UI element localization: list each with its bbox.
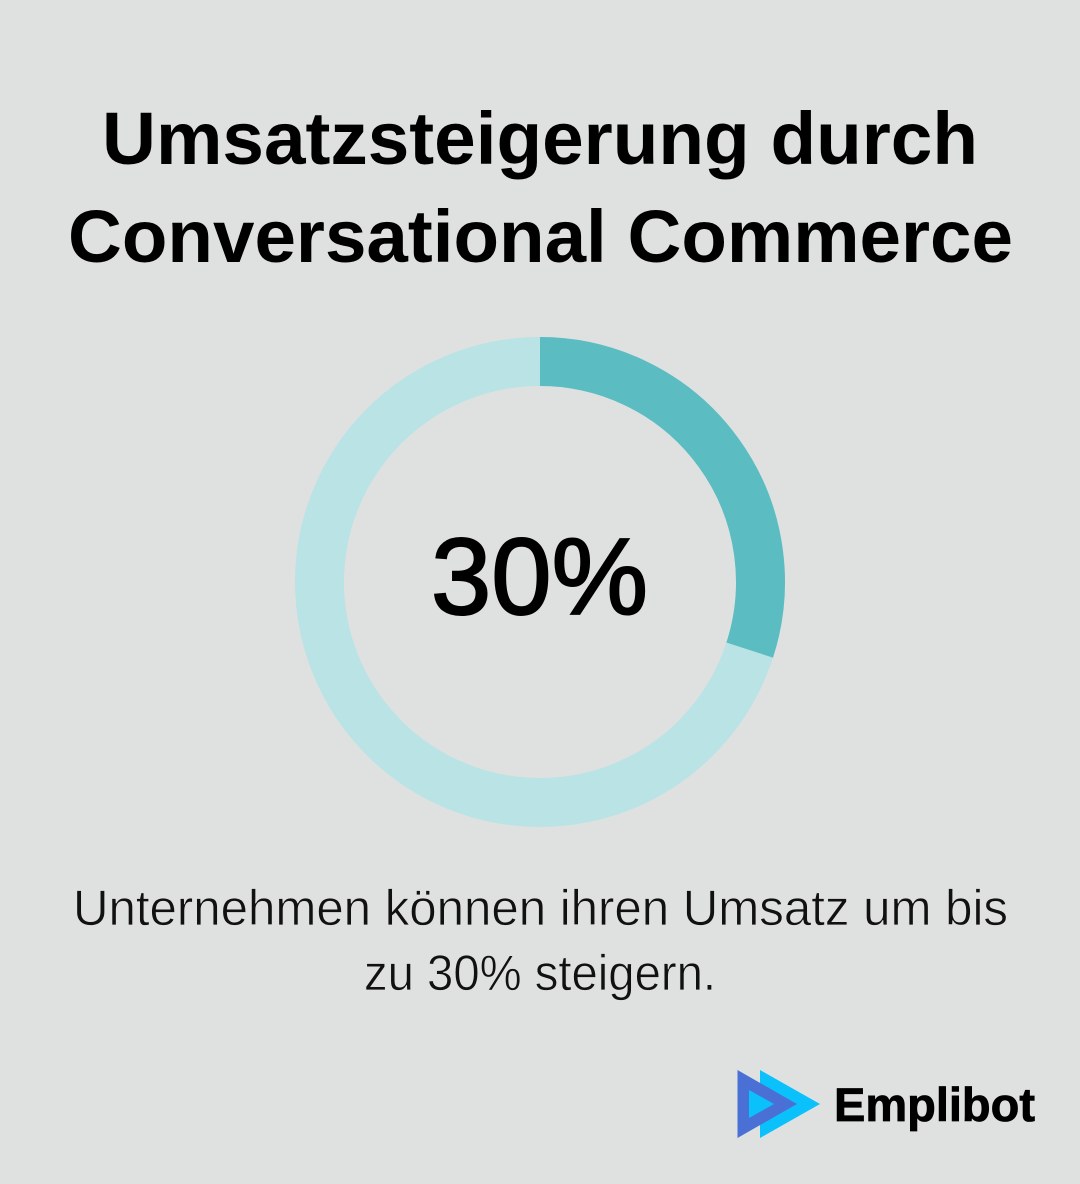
logo: Emplibot <box>738 1070 1035 1138</box>
description text: zu 30% steigern. <box>364 945 716 1001</box>
donut chart: 30% <box>320 362 760 802</box>
title: Conversational Commerce <box>68 195 1013 278</box>
description text: Unternehmen können ihren Umsatz um bis <box>73 880 1008 936</box>
icon: play triangles <box>738 1070 820 1138</box>
logo wordmark: Emplibot <box>834 1078 1035 1131</box>
center value: 30% <box>431 516 648 638</box>
title <box>68 97 1013 278</box>
donut value arc <box>540 362 760 650</box>
description text <box>73 880 1008 1001</box>
donut track <box>320 362 760 802</box>
title: Umsatzsteigerung durch <box>102 97 978 180</box>
